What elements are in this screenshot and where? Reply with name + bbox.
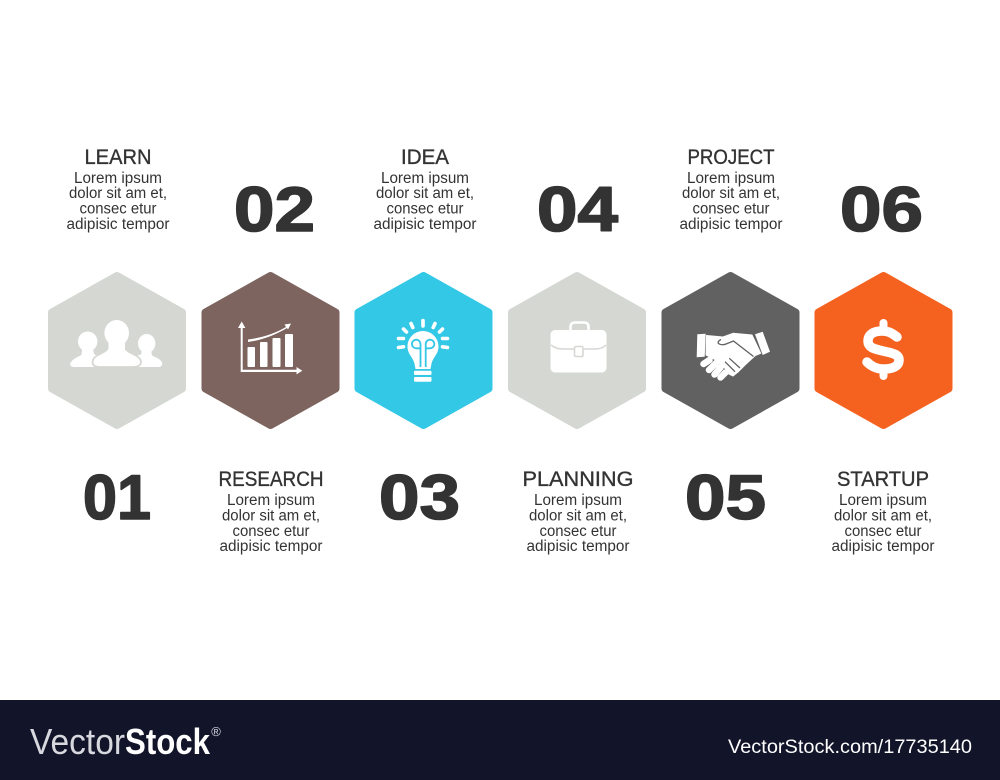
registered mark: ® [211,724,221,739]
footer logo: Vector [30,721,125,762]
hexagon 4: briefcase [512,276,642,425]
text block: IDEA: IDEA [401,146,449,169]
text block: LEARN: Lorem ipsum [74,170,162,187]
text block: IDEA: dolor sit am et, [376,185,474,202]
text block: PLANNING: dolor sit am et, [529,508,627,524]
text block: PLANNING: adipisic tempor [526,538,630,555]
hexagon 5: handshake [666,276,796,425]
text block: RESEARCH: consec etur [232,523,310,540]
text block: STARTUP: consec etur [844,523,922,540]
text block: LEARN [66,146,170,233]
icon: light bulb [398,320,448,382]
number 02: 02 [234,175,315,245]
icon: handshake [697,332,770,378]
text block: LEARN: dolor sit am et, [69,185,167,202]
text block: IDEA: Lorem ipsum [381,170,469,187]
icon: briefcase [550,322,606,372]
text block: STARTUP [832,468,934,555]
hexagon 6: dollar [818,276,948,425]
number 04: 04 [537,175,618,245]
number 05: 05 [685,463,766,533]
text block: PROJECT: consec etur [692,200,770,218]
hexagon 3: idea [358,276,488,425]
text block: LEARN: consec etur [80,200,156,218]
text block: PROJECT: PROJECT [688,146,775,169]
text block: PLANNING: Lorem ipsum [534,492,622,509]
text block: IDEA: consec etur [386,200,464,218]
number 01: 01 [83,463,151,533]
text block: STARTUP: Lorem ipsum [839,492,927,509]
text block: IDEA [374,146,476,233]
text block: LEARN: LEARN [84,146,152,169]
text block: PLANNING: PLANNING [522,468,634,491]
text block: PROJECT [680,146,782,233]
footer bar [0,700,1000,780]
footer logo [30,721,211,762]
text block: RESEARCH: Lorem ipsum [227,492,315,509]
text block: PROJECT: Lorem ipsum [687,170,775,187]
text block: LEARN: adipisic tempor [66,216,170,233]
text block: PLANNING: consec etur [540,523,616,540]
text block: PLANNING [522,468,634,555]
number 06: 06 [840,175,923,245]
text block: RESEARCH: RESEARCH [218,468,324,491]
icon: people [70,320,162,367]
icon: growth chart [238,322,302,374]
text block: STARTUP: adipisic tempor [832,538,934,555]
hexagon 2: chart [206,276,336,425]
icon: dollar sign [867,323,899,376]
text block: RESEARCH: dolor sit am et, [222,508,320,524]
number 03: 03 [379,463,460,533]
footer logo: Stock [125,721,211,762]
text block: RESEARCH [218,468,324,555]
footer image id: VectorStock.com/17735140 [728,736,972,758]
text block: STARTUP: STARTUP [837,468,929,491]
hexagon 1: people [52,276,182,425]
text block: STARTUP: dolor sit am et, [834,508,932,524]
text block: PROJECT: adipisic tempor [680,216,782,233]
text block: PROJECT: dolor sit am et, [682,185,780,202]
text block: IDEA: adipisic tempor [374,216,476,233]
text block: RESEARCH: adipisic tempor [220,538,322,555]
